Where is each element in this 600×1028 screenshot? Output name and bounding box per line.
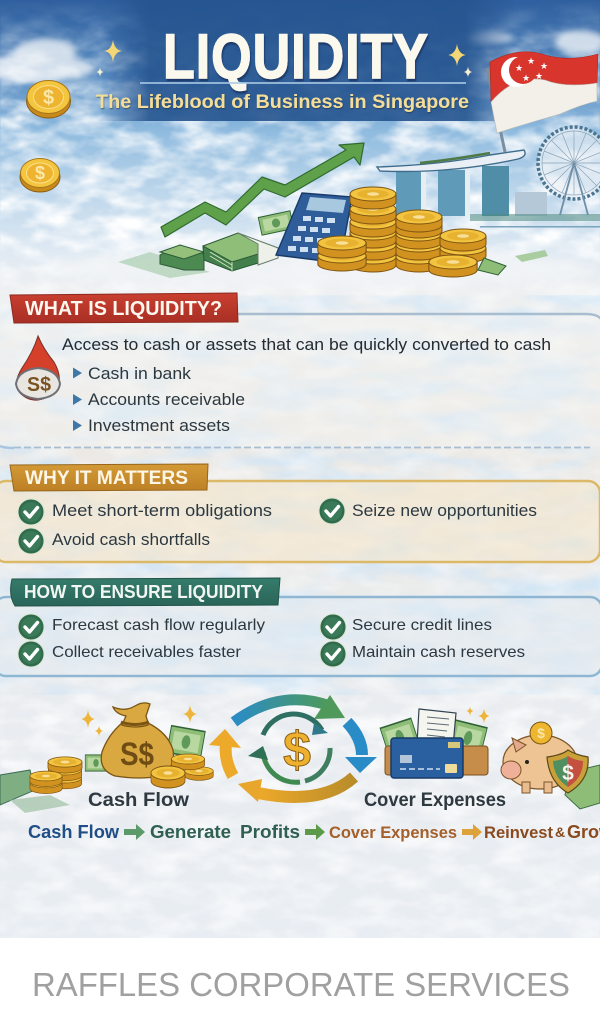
icon: floating coin 2: $ — [35, 163, 45, 183]
Singapore flag: ★ — [515, 63, 523, 73]
panel: how to ensure liquidity — [0, 578, 600, 676]
Singapore flag: ★ — [540, 61, 548, 71]
Singapore flag — [487, 52, 598, 152]
footer brand text: RAFFLES CORPORATE SERVICES — [32, 966, 570, 1003]
flow line: Cover Expenses — [329, 824, 457, 842]
ground haze under hero — [50, 250, 590, 286]
Singapore flag: ★ — [527, 56, 535, 66]
Singapore flag: ★ — [535, 71, 543, 81]
cash stacks — [118, 211, 294, 278]
flow line: Generate — [150, 822, 231, 842]
list item: accounts receivable: Accounts receivable — [88, 390, 245, 409]
list item: investment assets: Investment assets — [88, 416, 230, 435]
item: avoid cash shortfalls: Avoid cash shortfalls — [52, 530, 210, 549]
definition text: Access to cash or assets that can be quickly converted to cash — [62, 335, 551, 354]
icon: floating coin 2 — [20, 158, 60, 192]
illustration: cards, cash and document — [380, 706, 490, 778]
heading tab: how to ensure liquidity — [11, 578, 280, 606]
illustration: piggy bank with shield: $ — [537, 725, 545, 741]
heading tab: what is liquidity — [10, 293, 238, 323]
item: avoid cash shortfalls — [18, 528, 210, 554]
flow line: Cash Flow — [28, 822, 120, 842]
subtitle: The Lifeblood of Business in Singapore — [96, 92, 469, 113]
illustration: piggy bank with shield: $ — [562, 762, 574, 785]
heading tab: how to ensure liquidity: HOW TO ENSURE LIQUIDITY — [24, 582, 263, 602]
icon: S$ droplet — [16, 336, 60, 400]
Singapore Flyer ferris wheel — [538, 127, 600, 215]
item: seize new opportunities — [319, 498, 537, 524]
flow line: Reinvest — [484, 823, 553, 842]
title: LIQUIDITY — [163, 21, 428, 92]
Singapore skyline: Marina Bay Sands — [377, 150, 600, 228]
footer bar — [0, 938, 600, 1028]
flow line: Profits — [240, 822, 300, 842]
title divider — [140, 82, 466, 84]
item: maintain cash reserves — [320, 641, 525, 667]
item: forecast cash flow regularly: Forecast cash flow regularly — [52, 617, 265, 634]
flow line — [28, 822, 600, 842]
sparkles near title — [96, 40, 472, 77]
item: maintain cash reserves: Maintain cash reserves — [352, 644, 525, 661]
item: meet short-term obligations: Meet short-term obligations — [52, 501, 272, 520]
icon: S$ droplet: S$ — [27, 374, 51, 396]
illustration: money bag and coins — [0, 703, 213, 813]
panel: what is liquidity — [0, 293, 600, 448]
illustration: cycle arrows with dollar: $ — [283, 722, 311, 778]
icon: floating coin 1 — [26, 80, 70, 118]
heading tab: why it matters — [10, 464, 208, 491]
item: seize new opportunities: Seize new opportunities — [352, 501, 537, 520]
panel: why it matters — [0, 464, 600, 562]
growth arrow — [161, 143, 364, 237]
gold coin stacks — [318, 187, 548, 277]
illustration: cycle arrows with dollar — [209, 695, 377, 802]
item: collect receivables faster — [18, 641, 242, 667]
heading tab: what is liquidity: WHAT IS LIQUIDITY? — [25, 298, 222, 320]
flow line: & — [555, 824, 565, 840]
item: forecast cash flow regularly — [18, 614, 265, 640]
heading tab: why it matters: WHY IT MATTERS — [25, 468, 188, 489]
Singapore flag: ★ — [522, 73, 530, 83]
calculator — [276, 193, 352, 263]
title band — [100, 0, 515, 121]
item: secure credit lines — [320, 614, 492, 640]
item: meet short-term obligations — [18, 499, 272, 525]
label: cash flow: Cash Flow — [88, 790, 189, 811]
list item: cash in bank: Cash in bank — [88, 364, 192, 383]
item: collect receivables faster: Collect receivables faster — [52, 644, 242, 661]
illustration: piggy bank with shield — [501, 722, 600, 809]
item: secure credit lines: Secure credit lines — [352, 617, 492, 634]
icon: floating coin 1: $ — [43, 87, 54, 109]
label: cover expenses: Cover Expenses — [364, 790, 506, 811]
illustration: money bag and coins: S$ — [120, 736, 154, 772]
